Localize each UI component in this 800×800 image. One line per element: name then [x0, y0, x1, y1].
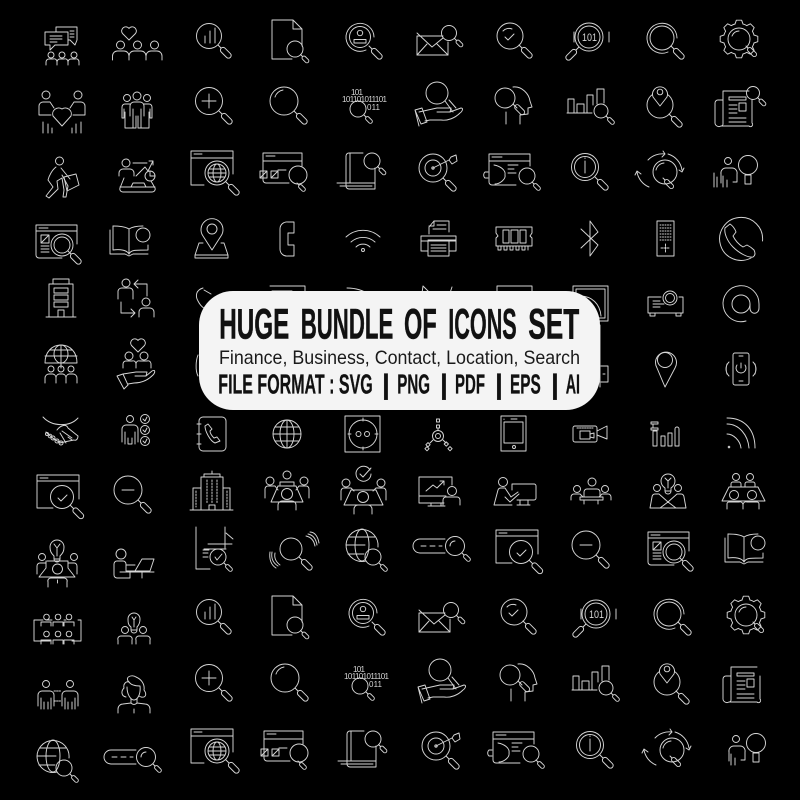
icon: bluetooth symbol [581, 221, 598, 256]
icon: window search [260, 153, 307, 192]
icon: newspaper repeat [723, 667, 761, 703]
icon: person at laptop [114, 549, 154, 578]
icon: location pin on map [195, 219, 228, 258]
file formats: FILE FORMAT : SVG [218, 368, 373, 399]
icon: phone call partly hidden [196, 288, 212, 310]
icon: envelope search repeat [419, 602, 466, 632]
icon: document check [196, 527, 233, 572]
icon: document search [272, 20, 310, 64]
heading [219, 300, 579, 348]
icon: open book search [110, 226, 150, 256]
file formats: | [382, 368, 390, 399]
icon: binary code magnifier: 101101011101 [342, 95, 388, 104]
icon: bar chart magnifier repeat [572, 666, 620, 702]
icon: globe over people [45, 345, 77, 383]
icon: telephone handset [280, 222, 294, 256]
icon: person magnifier repeat [729, 734, 766, 765]
icon: people swapping roles [118, 279, 154, 317]
icon: zoom out [114, 476, 152, 514]
icon: document search repeat [272, 596, 310, 640]
icon: location pin [656, 352, 676, 387]
icon: window gear repeat [488, 732, 545, 769]
icon: connected nodes [425, 419, 452, 451]
heading: ICONS [448, 300, 517, 348]
icon: people at long table [722, 474, 765, 509]
icon: globe [273, 420, 301, 448]
icon: phone in circle [720, 217, 763, 260]
icon: partly hidden round edge [196, 355, 198, 376]
icon: book search repeat [338, 731, 388, 767]
icon: heart and three people [112, 27, 162, 60]
icon: window with gear [484, 154, 541, 191]
icon: city buildings [190, 471, 233, 510]
icon: refresh search [635, 151, 684, 189]
file formats: | [440, 368, 448, 399]
icon: partly hidden device [497, 286, 532, 296]
icon: person at computer [494, 478, 536, 505]
icon: phone with power button and sound waves [726, 353, 756, 385]
icon: woman portrait [118, 676, 150, 713]
icon: head with magnifier [495, 87, 532, 124]
icon: phone book [197, 417, 226, 451]
icon: framed corner partly hidden [573, 286, 608, 321]
icon: globe search [346, 529, 388, 572]
heading: SET [528, 300, 579, 348]
icon: chat bubbles and people [45, 27, 79, 65]
icon: browser check search repeat [496, 530, 544, 575]
icon: magnifier with bars [196, 24, 232, 59]
icon: search field [413, 536, 471, 562]
icon: plain magnifier repeat [271, 664, 309, 702]
icon: gear search [720, 20, 758, 58]
icon: wifi signal [346, 230, 380, 252]
icon: double ring search [647, 23, 685, 60]
icon: partly hidden arc [347, 288, 370, 295]
icon: binary code magnifier: 101 [351, 88, 364, 97]
icon: browser globe search [191, 151, 240, 196]
icon: binary search: 101 [582, 32, 597, 44]
icon: search field bottom [104, 748, 162, 773]
icon: partly hidden frame [600, 325, 608, 387]
icon: memory chip [496, 227, 532, 250]
icon: office building [46, 279, 76, 317]
icon: head magnifier repeat [500, 664, 537, 701]
icon: two colleagues talking [38, 680, 78, 709]
icon: binary code magnifier [342, 88, 388, 124]
icon: pin magnifier repeat [654, 664, 690, 705]
icon: user search [346, 23, 383, 60]
icon: person with checklist [122, 414, 150, 446]
icon: bar chart magnifier [567, 89, 615, 125]
icon: globe search bottom [37, 740, 79, 783]
icon: wireless arcs [727, 418, 755, 448]
icon: hand holding magnifier [415, 82, 463, 126]
icon: browser search window [36, 225, 82, 265]
icon: gear search repeat [727, 596, 765, 634]
icon: open book repeat [725, 534, 765, 564]
file formats: EPS [510, 368, 541, 399]
title plaque [199, 291, 600, 410]
icon: target search [419, 154, 457, 192]
file formats: | [495, 368, 503, 399]
icon: tablet [501, 416, 526, 451]
icon: hand magnifier repeat [418, 659, 466, 703]
icon: plain magnifier [270, 87, 308, 125]
icon: browser search repeat [648, 532, 694, 572]
icon: meeting with approval check [341, 466, 386, 514]
icon: info search [572, 154, 609, 191]
icon: binary search [565, 23, 609, 61]
icon: hand holding people and heart [117, 339, 155, 389]
icon: presenter with chart on laptop [119, 159, 155, 192]
icon: info search repeat [576, 732, 614, 769]
icon: meeting around table [265, 471, 309, 510]
icon: person with magnifier and bars [714, 156, 758, 187]
icon: projector [648, 291, 683, 316]
icon: target repeat [422, 732, 460, 770]
heading: BUNDLE [301, 300, 393, 348]
icon: partly hidden arrows [421, 286, 452, 300]
icon: window search repeat [261, 731, 308, 770]
file formats: | [551, 368, 559, 399]
heading: OF [404, 300, 437, 348]
icon: idea with two people [118, 613, 150, 644]
icon: printer [421, 221, 456, 256]
icon: zoom in [196, 88, 233, 125]
icon: user search repeat [349, 599, 386, 636]
icon: idea team [650, 474, 686, 508]
icon: monitor chart presenter [419, 477, 460, 506]
icon: remote control [657, 221, 674, 256]
icon: zoom out repeat [572, 531, 610, 569]
icon: partly hidden window [270, 286, 305, 294]
icon: binary code magnifier: 011 [367, 103, 381, 112]
icon: small group meeting [571, 478, 611, 504]
icon: team table [34, 614, 81, 644]
icon: two people holding heart [39, 91, 85, 133]
icon: power socket [345, 416, 380, 452]
subtitle: Finance, Business, Contact, Location, Search [219, 347, 580, 369]
icon: browser globe repeat [191, 729, 240, 774]
heading: HUGE [219, 300, 289, 348]
file formats: AI [566, 368, 580, 399]
icon: signal bars [651, 422, 679, 446]
icon: double ring search repeat [654, 599, 692, 636]
icon: checkmark search repeat [501, 599, 537, 635]
icon: video camera [573, 426, 607, 442]
icon: team of three [122, 92, 152, 128]
file formats: PNG [397, 368, 430, 399]
icon: book search [337, 153, 387, 189]
icon: browser checkmark search [37, 475, 85, 520]
icon: binary search repeat [572, 600, 616, 638]
icon: bar magnifier repeat [196, 600, 232, 635]
icon: walking person with briefcase [46, 157, 79, 198]
icon: zoom in repeat [196, 664, 233, 702]
icon: checkmark search [497, 23, 533, 59]
icon: newspaper search [715, 86, 767, 127]
icon: binary code magnifier repeat [344, 665, 390, 701]
icon: location pin magnifier [647, 87, 683, 128]
icon: idea meeting [37, 540, 78, 587]
file formats: PDF [455, 368, 485, 399]
icon: handshake [43, 417, 78, 445]
icon: refresh search repeat [642, 729, 691, 767]
icon: at sign [723, 286, 759, 322]
icon: magnifier with signal waves [270, 532, 319, 571]
icon: envelope search [417, 26, 464, 55]
